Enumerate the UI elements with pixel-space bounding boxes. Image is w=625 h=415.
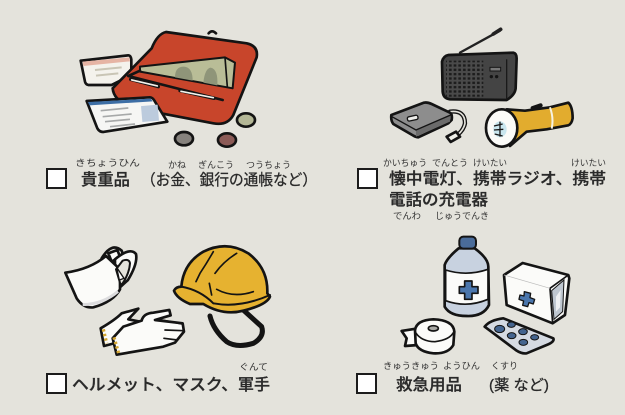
panel: valuables: [47, 31, 317, 189]
icon: blister pack: [485, 318, 554, 353]
furigana: keitai 2: けいたい: [571, 158, 606, 168]
icon: medicine box: [504, 263, 569, 323]
icon: helmet strap: [210, 310, 262, 345]
label: first aid supplies: 救急用品: [396, 376, 462, 394]
panel: electronics: [358, 29, 606, 221]
furigana: juudenki: じゅうでんき: [435, 211, 489, 221]
checkbox: [358, 169, 377, 188]
icon: work gloves: [101, 309, 184, 355]
furigana: kyuukyuu: きゅうきゅう: [383, 361, 439, 371]
icon: radio, power bank and flashlight: [391, 29, 573, 147]
icon: wallet, cards, passbook and coins: [81, 31, 257, 147]
icon: mask: [65, 248, 136, 307]
panel: protective gear: [47, 246, 270, 394]
icon: medicine bottle, box, tape and pills: [402, 237, 569, 353]
checkbox: [47, 374, 66, 393]
label: valuables: 貴重品: [81, 171, 130, 189]
checkbox: [47, 169, 66, 188]
icon: medicine bottle: [445, 237, 489, 316]
icon: card: [81, 55, 131, 85]
furigana: youhin: ようひん: [443, 361, 480, 371]
icon: coins: [175, 113, 255, 147]
label: phone charger: 電話の充電器: [389, 191, 488, 209]
icon: yellow helmet: [174, 246, 270, 312]
icon: radio: [442, 29, 517, 100]
label: work gloves: 軍手: [238, 376, 270, 394]
furigana: denwa: でんわ: [393, 211, 421, 221]
furigana: gunte: ぐんて: [239, 362, 268, 372]
icon: medical tape: [402, 319, 454, 353]
furigana: kane: かね: [168, 160, 186, 170]
furigana: dentou: でんとう: [432, 158, 468, 168]
icon: red wallet: [113, 31, 257, 124]
icon: mask, gloves and helmet: [65, 246, 270, 355]
furigana: ginkou: ぎんこう: [198, 159, 234, 170]
furigana: kichouhin: きちょうひん: [75, 158, 140, 168]
label: flashlight, radio, phone: 懐中電灯、携帯ラジオ、携帯: [389, 170, 606, 188]
furigana: tsuuchou: つうちょう: [246, 160, 291, 170]
furigana: keitai 1: けいたい: [473, 158, 507, 168]
label: medicine etc: (薬 など): [489, 377, 549, 394]
icon: flashlight: [486, 103, 573, 147]
panel: first aid: [357, 237, 569, 394]
furigana: kusuri: くすり: [491, 361, 518, 371]
checkbox: [357, 374, 376, 393]
furigana: kaichuu: かいちゅう: [383, 158, 427, 168]
icon: power bank: [391, 102, 465, 142]
label: helmet, mask: ヘルメット、マスク、: [72, 376, 238, 394]
label: money and bankbook: （お金、銀行の通帳など）: [141, 171, 317, 189]
icon: bank passbook: [87, 97, 167, 132]
